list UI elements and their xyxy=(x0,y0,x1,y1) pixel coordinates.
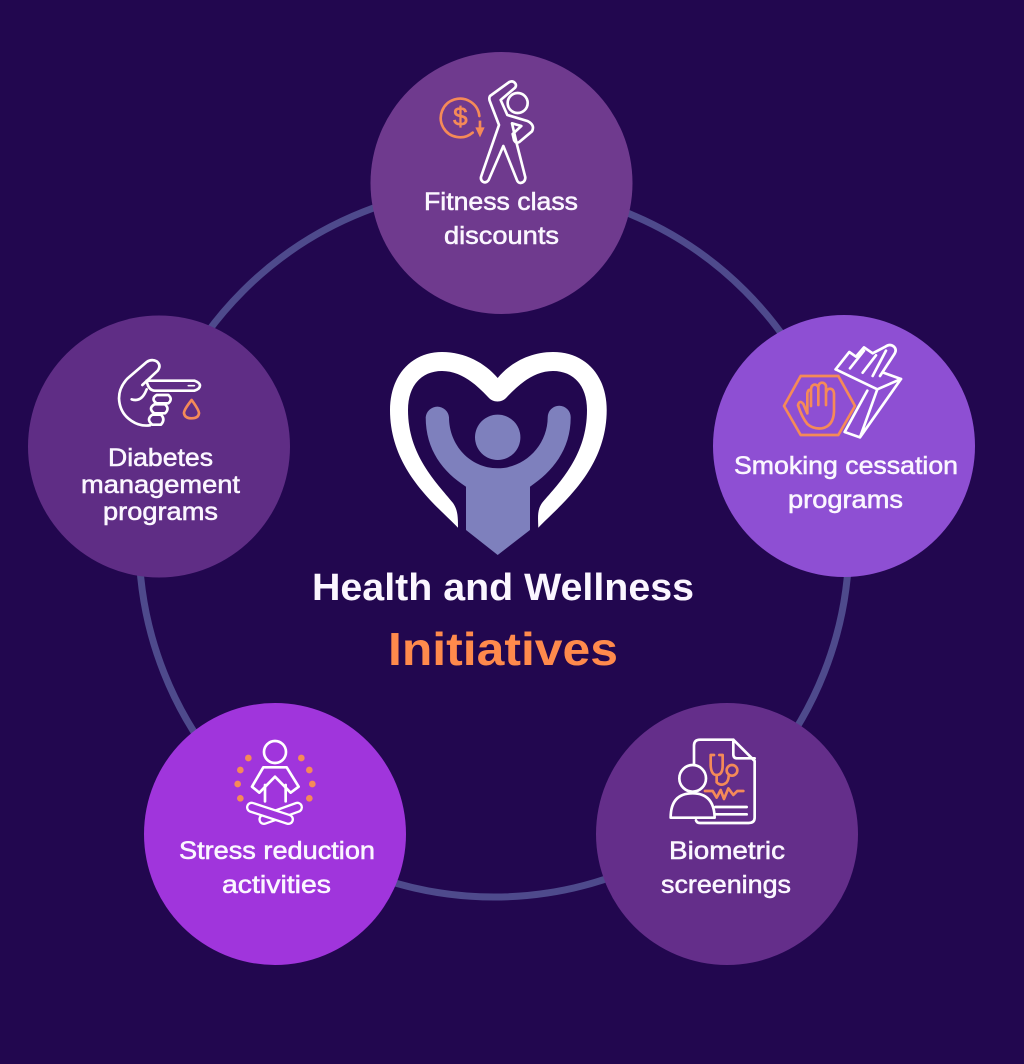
title xyxy=(312,567,694,675)
panel: smoking cessation programs xyxy=(713,315,975,577)
label: activities xyxy=(222,871,331,899)
panel: diabetes management programs xyxy=(28,316,290,578)
panel circle xyxy=(144,703,406,965)
person xyxy=(426,406,571,555)
label: Diabetes xyxy=(108,444,213,472)
label xyxy=(661,837,791,899)
label: Stress reduction xyxy=(179,837,375,865)
panel circle xyxy=(370,52,632,314)
label xyxy=(179,837,375,899)
label: management xyxy=(81,471,240,499)
panel circle xyxy=(596,703,858,965)
label: Smoking cessation xyxy=(734,452,958,480)
label xyxy=(81,444,240,526)
label: Biometric xyxy=(669,837,785,865)
label xyxy=(734,452,958,514)
label xyxy=(424,188,578,250)
panel: biometric screenings xyxy=(596,703,858,965)
icon: stop hand and cigarette pack xyxy=(784,345,901,437)
panel: fitness class discounts xyxy=(370,52,632,314)
center logo: heart with raised-arms person xyxy=(390,352,607,555)
icon: stretching figure with discount: $ xyxy=(453,102,468,132)
icon: finger with blood drop xyxy=(119,360,200,426)
icon: stretching figure with discount xyxy=(441,81,533,183)
label: Fitness class xyxy=(424,188,578,216)
title: Health and Wellness xyxy=(312,567,694,609)
person head xyxy=(475,415,520,460)
connecting ring xyxy=(139,187,849,897)
panel: stress reduction activities xyxy=(144,703,406,965)
icon: meditating person xyxy=(234,741,316,819)
panel circle xyxy=(713,315,975,577)
label: programs xyxy=(103,498,218,526)
label: discounts xyxy=(444,222,559,250)
heart outline xyxy=(390,352,607,528)
panel circle xyxy=(28,316,290,578)
label: screenings xyxy=(661,871,791,899)
label: programs xyxy=(788,486,903,514)
title: Initiatives xyxy=(388,623,618,675)
icon: patient and medical report xyxy=(671,740,755,823)
